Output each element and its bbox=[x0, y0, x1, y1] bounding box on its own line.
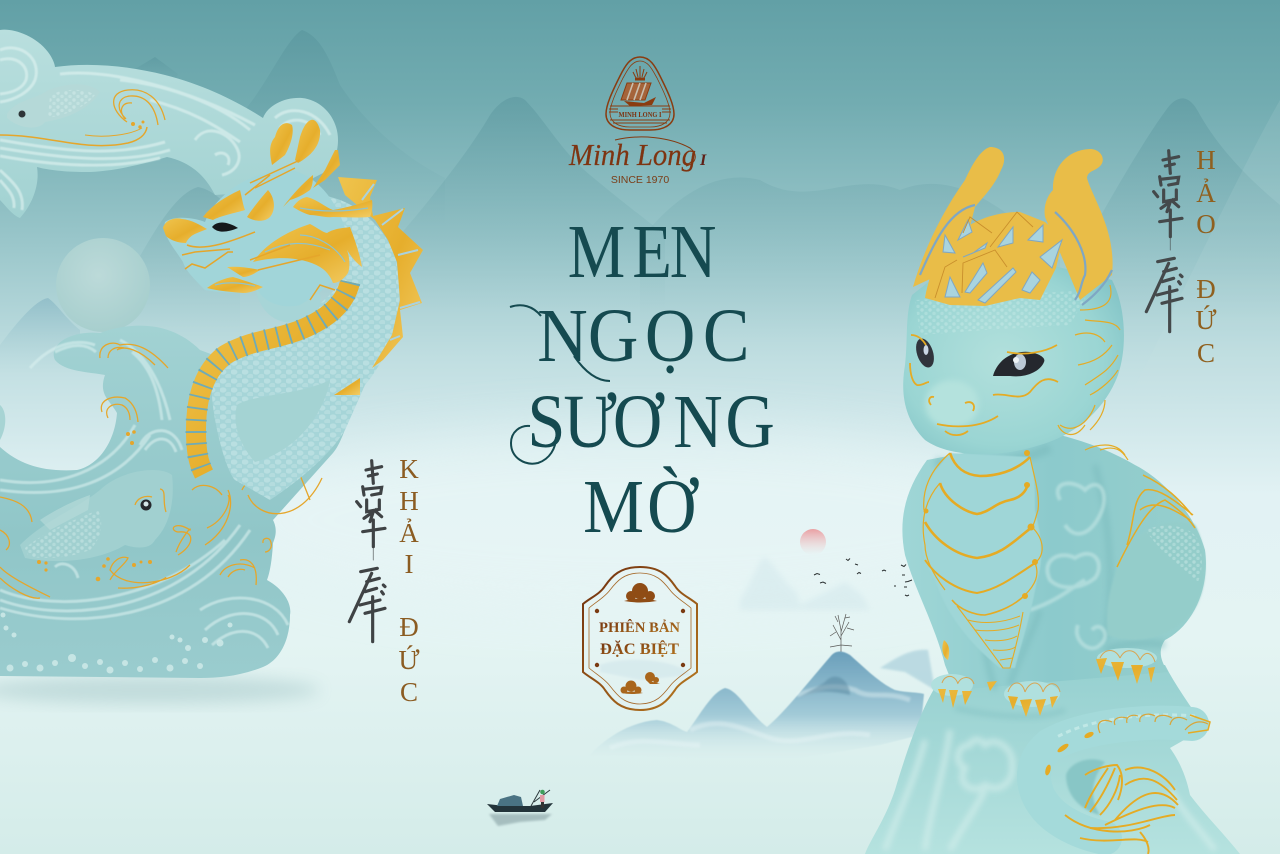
upper wave arch bbox=[0, 30, 338, 218]
birds flock bbox=[814, 558, 917, 596]
chest plate bbox=[922, 453, 1041, 668]
chest gold scallops bbox=[923, 453, 1042, 668]
rump gold lines bbox=[1117, 475, 1195, 567]
badge inner frame bbox=[589, 573, 691, 704]
title: MEN NGỌC SƯƠNG MỜ: MỜ bbox=[583, 465, 699, 549]
name: HẢO ĐỨC: Ả bbox=[1196, 178, 1216, 208]
dragon leg bbox=[236, 380, 330, 462]
title swashes bbox=[510, 305, 610, 464]
dragon head bbox=[164, 170, 350, 306]
name: HẢO ĐỨC bbox=[1196, 145, 1217, 368]
scene: sun, birds and far peaks bbox=[740, 529, 917, 652]
fish eye bbox=[140, 500, 152, 510]
name: HẢO ĐỨC: O bbox=[1196, 209, 1216, 239]
icon: lower clouds bbox=[620, 672, 660, 694]
bubble foam bbox=[0, 612, 232, 674]
tail-side fin triangle bbox=[334, 378, 360, 395]
gold on lower waves bbox=[0, 343, 335, 598]
roman numeral: I bbox=[699, 152, 707, 169]
lower wave ridges bbox=[0, 340, 288, 648]
mane gold lines bbox=[1058, 285, 1128, 460]
fish in the wave bbox=[20, 470, 173, 561]
head bbox=[903, 265, 1124, 454]
name: HẢO ĐỨC: C bbox=[1197, 338, 1215, 368]
neck curl under chin bbox=[255, 276, 321, 322]
snout bbox=[925, 380, 979, 428]
name: KHẢI ĐỨC: H bbox=[399, 486, 419, 516]
figurine: Hảo Đức dragon bbox=[865, 147, 1240, 854]
icon: red sun bbox=[800, 529, 826, 555]
name: KHẢI ĐỨC: K bbox=[399, 454, 419, 484]
figurine: Khải Đức dragon bbox=[0, 30, 423, 678]
dragon dorsal fins bbox=[338, 177, 423, 368]
tail bbox=[1034, 723, 1192, 838]
logo small wordmark: MINH LONG I bbox=[618, 110, 662, 119]
dragon body right bbox=[902, 435, 1206, 690]
dragon eye bbox=[212, 223, 238, 232]
fish on the wave bbox=[7, 84, 100, 128]
gold face lines bbox=[182, 160, 335, 300]
pearl bbox=[56, 238, 150, 332]
crown gold base bbox=[925, 212, 1063, 306]
misty mountain backdrop bbox=[0, 30, 1280, 400]
title: MEN NGỌC SƯƠNG MỜ: NGỌC bbox=[537, 293, 750, 378]
name: HẢO ĐỨC: H bbox=[1196, 145, 1216, 175]
right eye bbox=[993, 352, 1044, 376]
wave ridges bbox=[0, 48, 330, 210]
icon: triangular crest bbox=[606, 57, 674, 130]
title: MEN NGỌC SƯƠNG MỜ: MEN bbox=[568, 210, 716, 294]
face gold lines bbox=[910, 335, 1058, 435]
fin veins bbox=[362, 184, 420, 340]
left eye bbox=[913, 336, 937, 370]
name: KHẢI ĐỨC: Đ bbox=[399, 612, 419, 642]
calligraphy signature: Khải Đức bbox=[349, 461, 385, 642]
name: HẢO ĐỨC: Ứ bbox=[1196, 305, 1217, 335]
front and rear paws with claws bbox=[931, 640, 1157, 717]
body cloud swirls bbox=[1030, 483, 1105, 648]
calligraphy signature: Hảo Đức bbox=[1146, 151, 1182, 332]
badge text: PHIÊN BẢN bbox=[599, 619, 680, 636]
title: MEN NGỌC SƯƠNG MỜ: SƯƠNG bbox=[527, 380, 775, 464]
crown petal lines bbox=[935, 212, 1033, 298]
logo: Minh Long I bbox=[568, 57, 707, 186]
name: KHẢI ĐỨC: Ứ bbox=[399, 645, 420, 675]
badge outer frame bbox=[583, 567, 697, 710]
title: MEN NGỌC SƯƠNG MỜ bbox=[510, 210, 775, 549]
name: KHẢI ĐỨC: Ả bbox=[399, 518, 419, 548]
rock folds bbox=[885, 730, 1215, 850]
crown pale gaps bbox=[943, 220, 1062, 303]
ink mountains bbox=[590, 650, 935, 758]
mist over the middle bbox=[220, 430, 1060, 610]
name: HẢO ĐỨC: Đ bbox=[1196, 274, 1216, 304]
dragon belly band bbox=[196, 282, 350, 474]
dragon body bbox=[212, 194, 399, 500]
mane blue veins bbox=[215, 208, 368, 286]
body shading bbox=[935, 448, 1165, 716]
gold mane and face bbox=[163, 120, 372, 293]
left figurine shadow bbox=[0, 676, 320, 704]
gold wave lines upper bbox=[0, 90, 165, 146]
icon: bare tree bbox=[830, 614, 854, 652]
boat with reflection bbox=[487, 790, 553, 826]
tail fin gold bbox=[1065, 765, 1178, 854]
wordmark arc bbox=[615, 137, 695, 166]
name: KHẢI ĐỨC bbox=[399, 454, 420, 707]
badge: special edition: ĐẶC BIỆT bbox=[600, 640, 679, 658]
forehead scale texture bbox=[915, 290, 1090, 335]
name: KHẢI ĐỨC: I bbox=[404, 549, 414, 579]
icon: top cloud bbox=[624, 583, 657, 602]
horn blue edges bbox=[920, 205, 1112, 305]
horns bbox=[913, 147, 1113, 300]
faint far mountains bbox=[740, 557, 870, 610]
badge corner dots bbox=[595, 609, 685, 667]
haunch bbox=[1107, 522, 1205, 640]
gold beads bbox=[37, 430, 306, 581]
name: KHẢI ĐỨC: C bbox=[400, 677, 418, 707]
lower wave mass bbox=[0, 326, 353, 678]
tail gold scutes bbox=[1098, 714, 1210, 733]
rock base bbox=[865, 665, 1240, 854]
since line: SINCE 1970 bbox=[611, 174, 669, 186]
badge: special edition bbox=[583, 567, 697, 710]
lower left fragment bbox=[0, 405, 5, 440]
script wordmark: Minh Long bbox=[568, 137, 696, 172]
